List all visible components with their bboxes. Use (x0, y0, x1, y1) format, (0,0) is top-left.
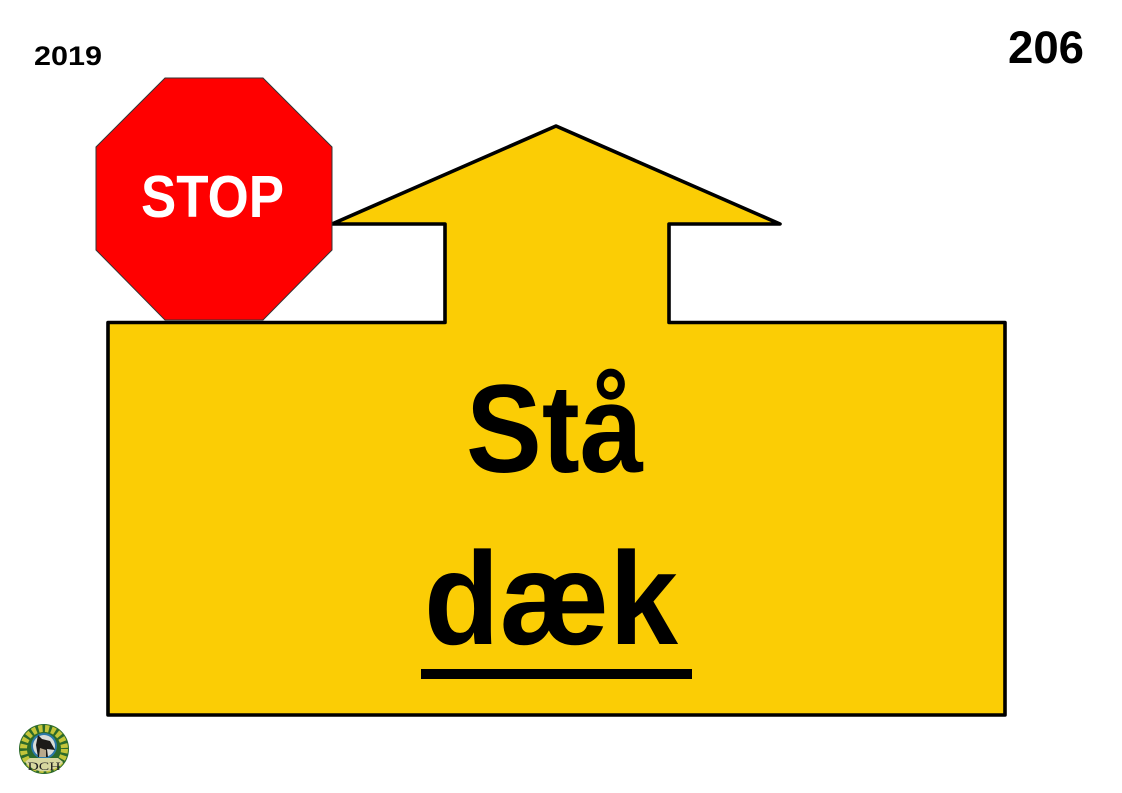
stop sign: STOP (141, 164, 284, 230)
logo: DCH badge: DCH (28, 759, 61, 773)
stop sign (96, 78, 332, 320)
instruction word: dæk: dæk (424, 525, 679, 672)
instruction word: Stå: Stå (466, 360, 643, 499)
year label: 2019 (34, 41, 102, 71)
logo: DCH badge (19, 724, 69, 774)
underline (421, 669, 692, 679)
sign number: 206 (1008, 22, 1084, 73)
arrow sign panel (108, 126, 1005, 715)
